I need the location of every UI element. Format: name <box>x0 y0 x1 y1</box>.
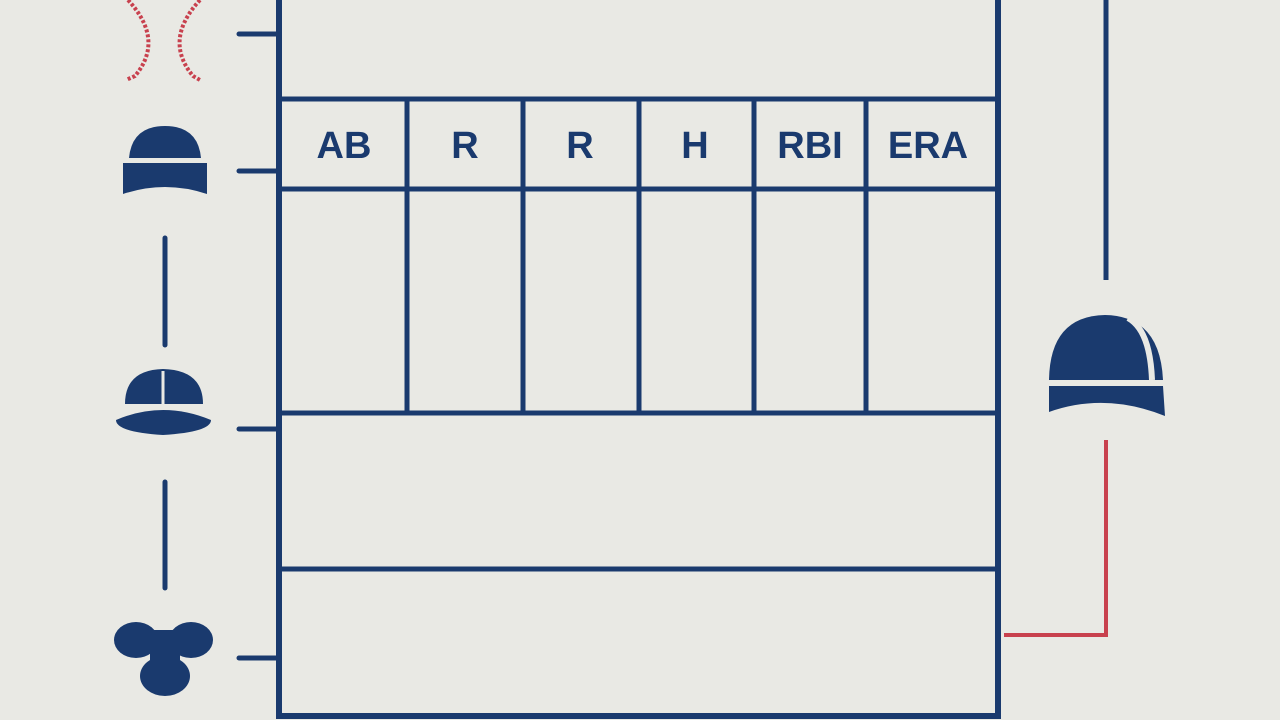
header labels: RBI <box>777 125 843 167</box>
scorecard frame <box>279 0 998 716</box>
header labels <box>317 125 968 167</box>
icon: baseball seams <box>126 0 200 80</box>
icon: cap 1 <box>123 126 207 194</box>
header labels: H <box>681 125 709 167</box>
header labels: AB <box>317 125 371 167</box>
right navy line <box>1104 0 1108 280</box>
icon: right cap <box>1049 315 1165 416</box>
header labels: ERA <box>888 125 968 167</box>
icon: glove cluster <box>114 622 213 696</box>
header labels: R <box>451 125 479 167</box>
icon: helmet 2 <box>116 369 211 435</box>
red connector <box>1004 440 1106 635</box>
tick connectors <box>165 34 279 658</box>
header labels: R <box>566 125 594 167</box>
